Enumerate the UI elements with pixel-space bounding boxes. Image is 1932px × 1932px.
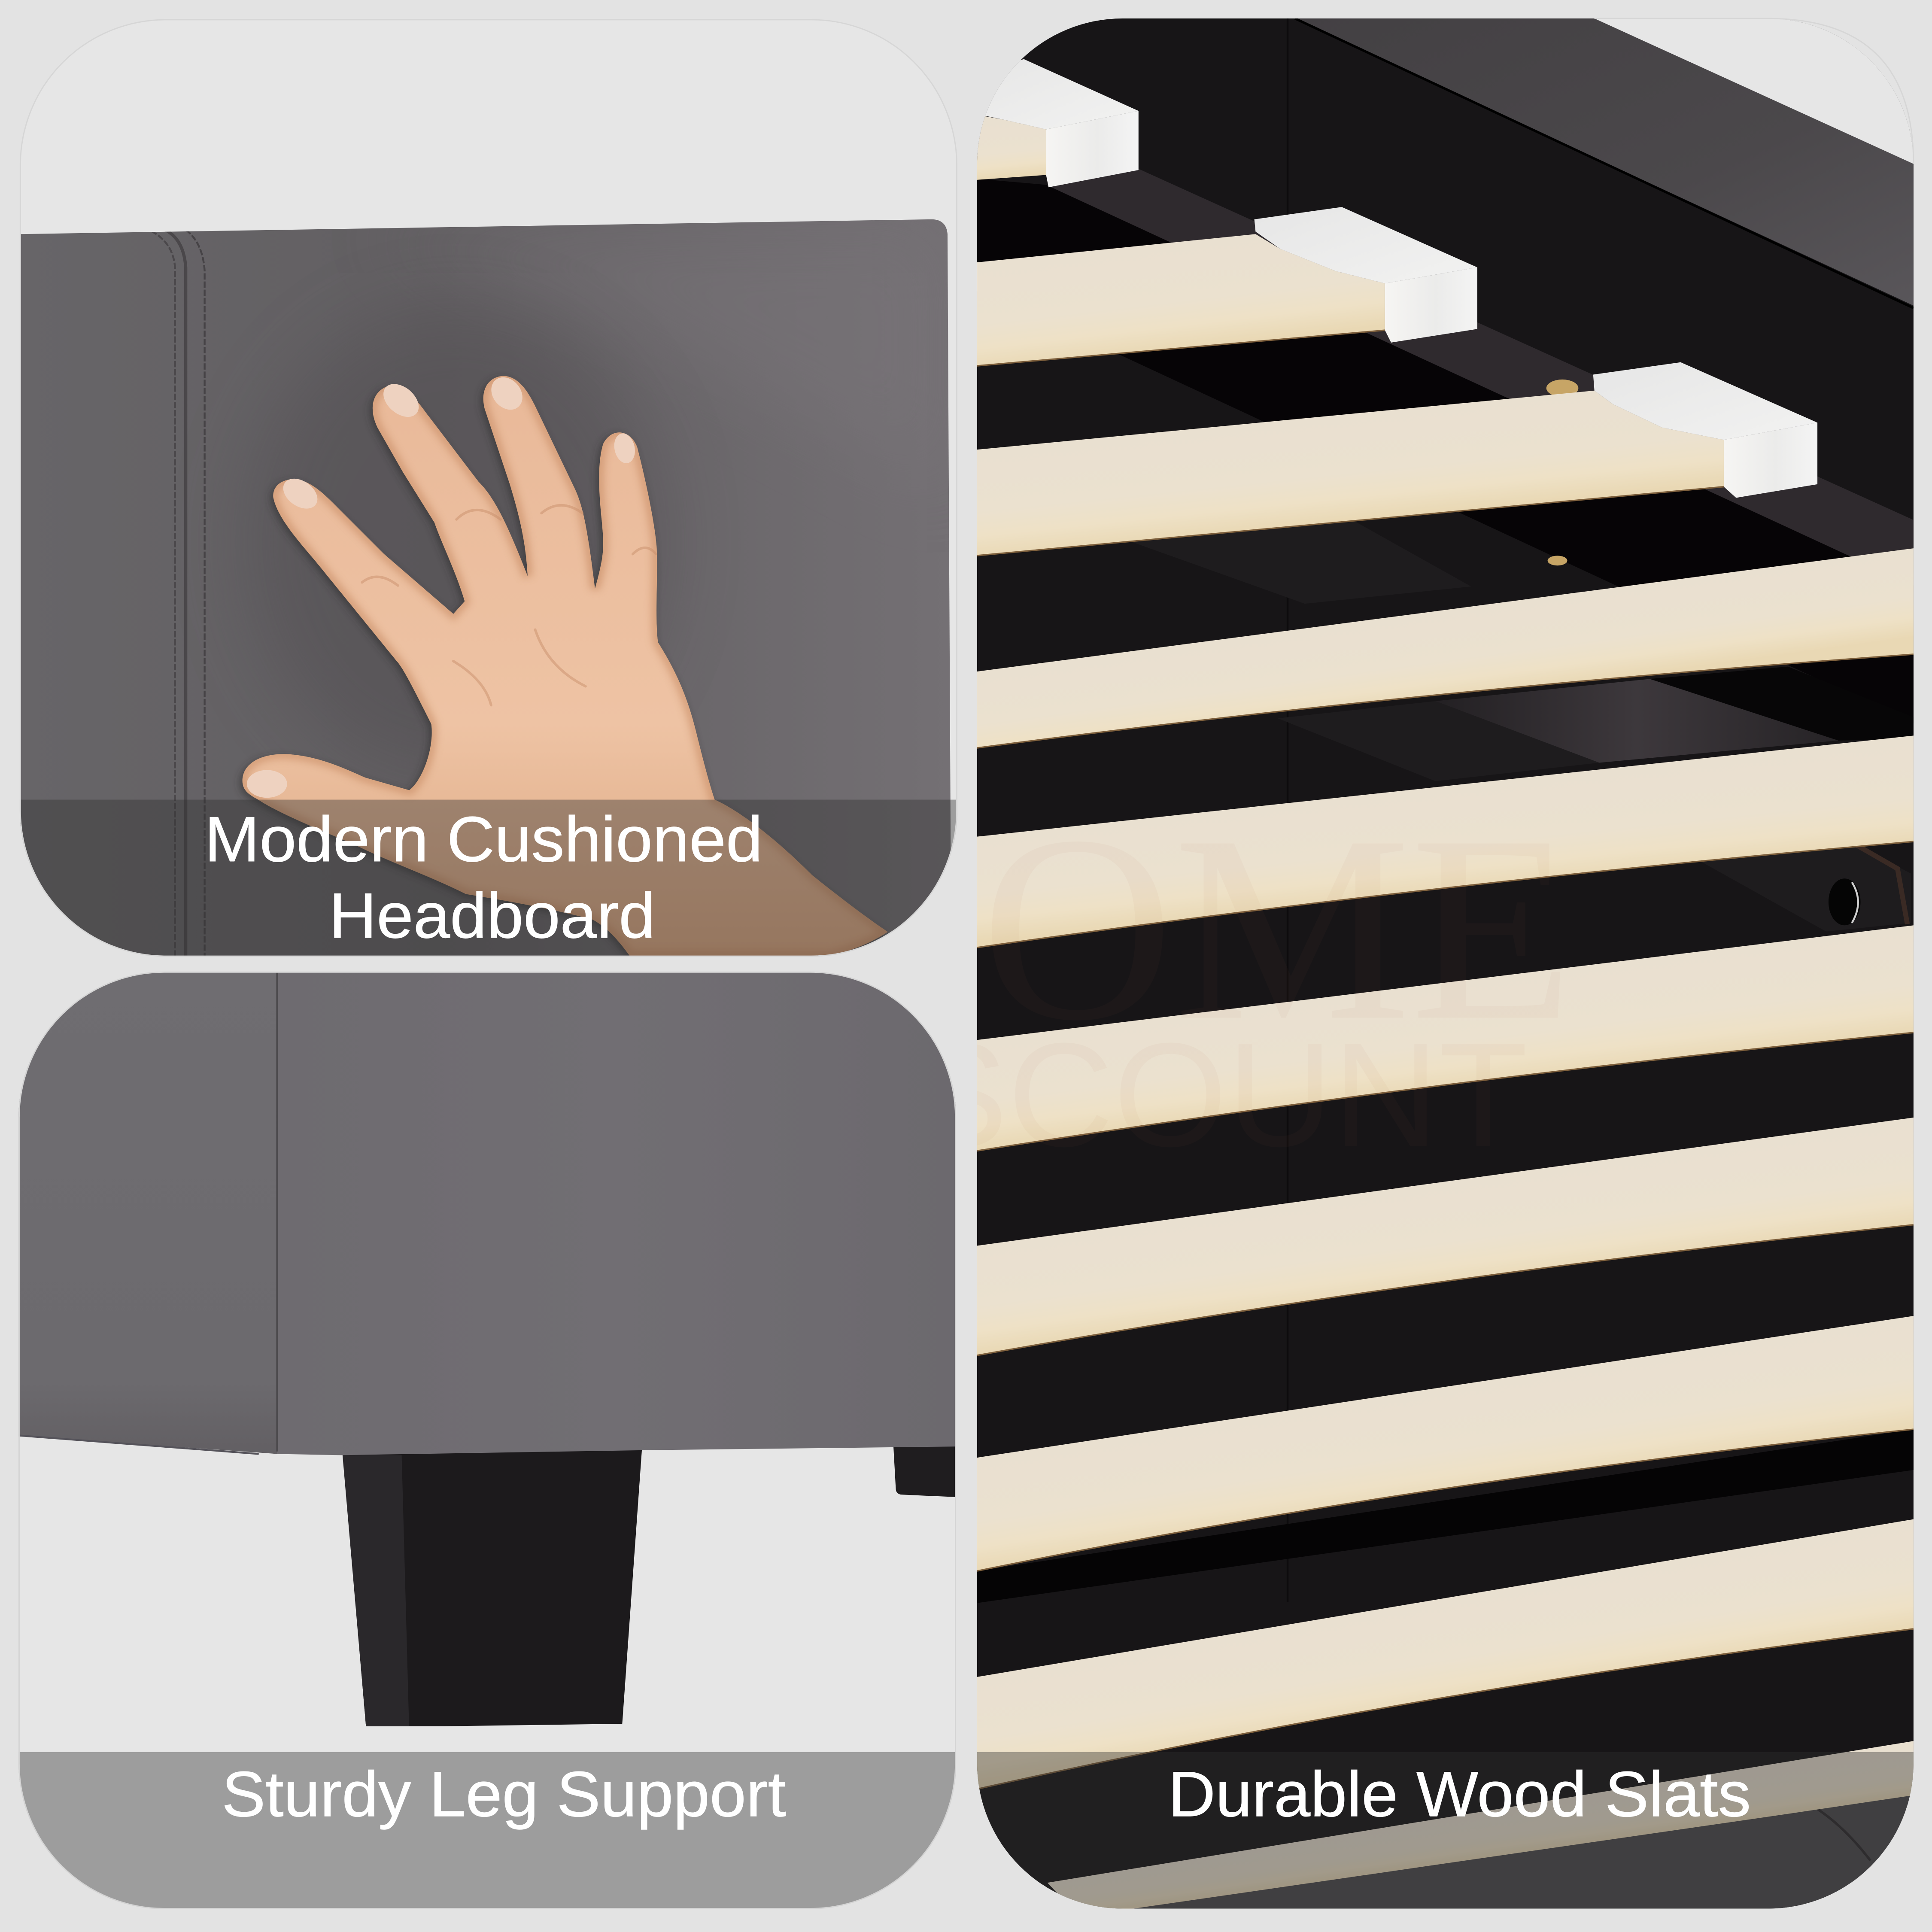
slat 3 with clip — [976, 362, 1817, 556]
caption band: leg support — [18, 1752, 956, 1908]
caption band: wood slats — [977, 1752, 1914, 1908]
slat 10 — [1047, 1741, 1914, 1908]
watermark: HOME — [789, 781, 1574, 1076]
caption band: headboard — [20, 800, 957, 956]
metal bracket with hole — [1700, 845, 1911, 932]
under-slat frame parts — [1132, 517, 1914, 781]
metal side rail — [1046, 169, 1914, 585]
bottom leather rail — [1109, 1786, 1914, 1908]
watermark: DISCOUNT — [764, 1012, 1528, 1177]
corner background cutout — [1595, 18, 1914, 164]
dark fabric base — [977, 18, 1914, 1908]
rear bed leg — [893, 1444, 956, 1497]
caption: Modern Cushioned Headboard: Modern Cushioned — [204, 803, 762, 875]
caption: Sturdy Leg Support: Sturdy Leg Support — [222, 1758, 786, 1830]
panel: leg support — [18, 972, 956, 1908]
panel: wood slats — [764, 18, 1914, 1908]
caption: Modern Cushioned Headboard — [204, 803, 762, 951]
slat 4 — [977, 548, 1914, 748]
fabric seam — [1287, 18, 1288, 1602]
slat 9 — [977, 1519, 1914, 1789]
slat 1 with clip — [967, 59, 1139, 187]
headboard leather — [20, 210, 957, 956]
panel outline: wood slats top right — [1595, 18, 1914, 164]
slat 8 — [977, 1316, 1914, 1571]
hand pressing headboard — [240, 371, 888, 958]
slat 2 with clip — [976, 207, 1477, 366]
panel outline: headboard — [20, 20, 957, 956]
slat 6 — [977, 925, 1914, 1151]
panel: cushioned headboard — [20, 219, 957, 956]
panel outline: leg support — [19, 972, 956, 1908]
brass bolts — [1546, 380, 1578, 565]
caption: Durable Wood Slats: Durable Wood Slats — [1168, 1758, 1751, 1830]
slat 7 — [977, 1118, 1914, 1355]
caption: Modern Cushioned Headboard: Headboard — [329, 880, 656, 951]
leather side rail — [1295, 18, 1914, 308]
lower black band — [977, 1429, 1914, 1603]
frame corner leather — [18, 972, 956, 1455]
slat 5 — [977, 735, 1914, 948]
bed leg — [343, 1449, 642, 1726]
black shadow band — [976, 179, 1914, 723]
